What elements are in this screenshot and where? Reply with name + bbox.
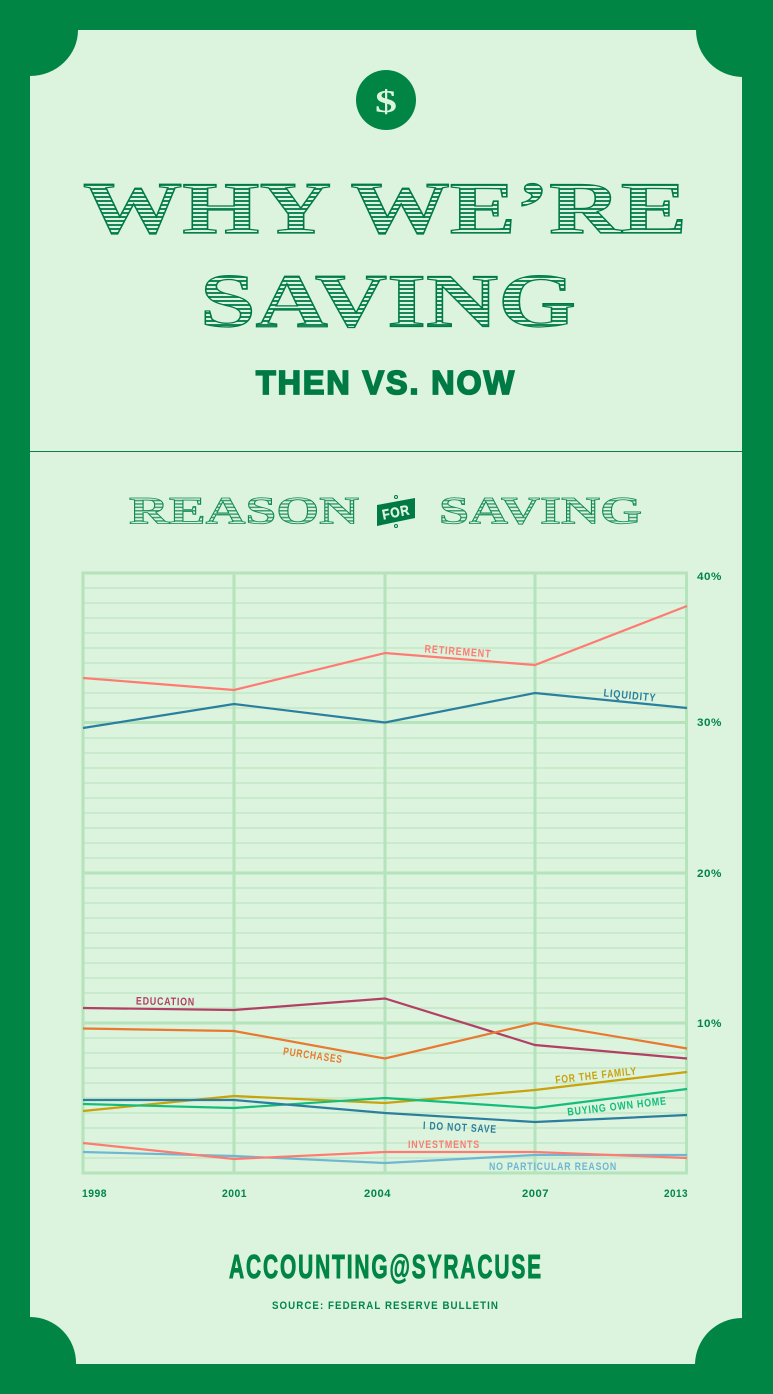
series: education	[83, 998, 687, 1058]
series: buying own home	[83, 1089, 687, 1108]
x axis labels: 1998	[82, 1188, 107, 1200]
x axis labels: 2001	[222, 1188, 247, 1200]
badge: for	[377, 496, 415, 528]
x axis labels: 2007	[522, 1188, 549, 1200]
badge: for: FOR	[381, 501, 411, 523]
icon: dollar coin: $	[375, 83, 397, 119]
y axis labels: 40%	[697, 571, 722, 583]
label: purchases: PURCHASES	[282, 1046, 343, 1066]
label: buying own home: BUYING OWN HOME	[567, 1095, 667, 1119]
label: retirement: RETIREMENT	[424, 643, 492, 661]
x axis labels: 2013	[664, 1188, 688, 1200]
series: no particular reason	[83, 1152, 687, 1163]
source note: SOURCE: FEDERAL RESERVE BULLETIN	[272, 1300, 499, 1312]
series: retirement	[83, 606, 687, 690]
y axis labels: 10%	[697, 1018, 722, 1030]
label: i do not save: I DO NOT SAVE	[423, 1120, 497, 1136]
line chart: reason for saving	[82, 571, 722, 1200]
series: investments	[83, 1143, 687, 1159]
y axis labels	[697, 571, 722, 1030]
label: investments: INVESTMENTS	[408, 1139, 480, 1151]
x axis labels: 2004	[364, 1188, 391, 1200]
y axis labels: 20%	[697, 868, 722, 880]
series: i do not save	[83, 1100, 687, 1122]
section heading: reason for saving: REASON	[129, 490, 359, 532]
label: liquidity: LIQUIDITY	[603, 687, 657, 705]
brand logo: ACCOUNTING@SYRACUSE	[229, 1249, 543, 1286]
label: for the family: FOR THE FAMILY	[555, 1065, 638, 1087]
divider	[30, 451, 742, 452]
title: WHY WE’RE	[83, 168, 687, 250]
y axis labels: 30%	[697, 717, 722, 729]
subtitle: THEN VS. NOW	[256, 364, 516, 401]
label: no particular reason: NO PARTICULAR REASON	[489, 1161, 617, 1173]
section heading: reason for saving: SAVING	[439, 490, 642, 532]
chart grid	[83, 573, 687, 1173]
title: SAVING	[200, 260, 576, 344]
icon: dollar coin	[356, 70, 416, 130]
title	[83, 168, 687, 344]
section heading: reason for saving	[129, 490, 642, 532]
series: purchases	[83, 1023, 687, 1058]
series: for the family	[83, 1072, 687, 1111]
x axis labels	[82, 1188, 688, 1200]
series: liquidity	[83, 693, 687, 728]
label: education: EDUCATION	[136, 995, 195, 1009]
